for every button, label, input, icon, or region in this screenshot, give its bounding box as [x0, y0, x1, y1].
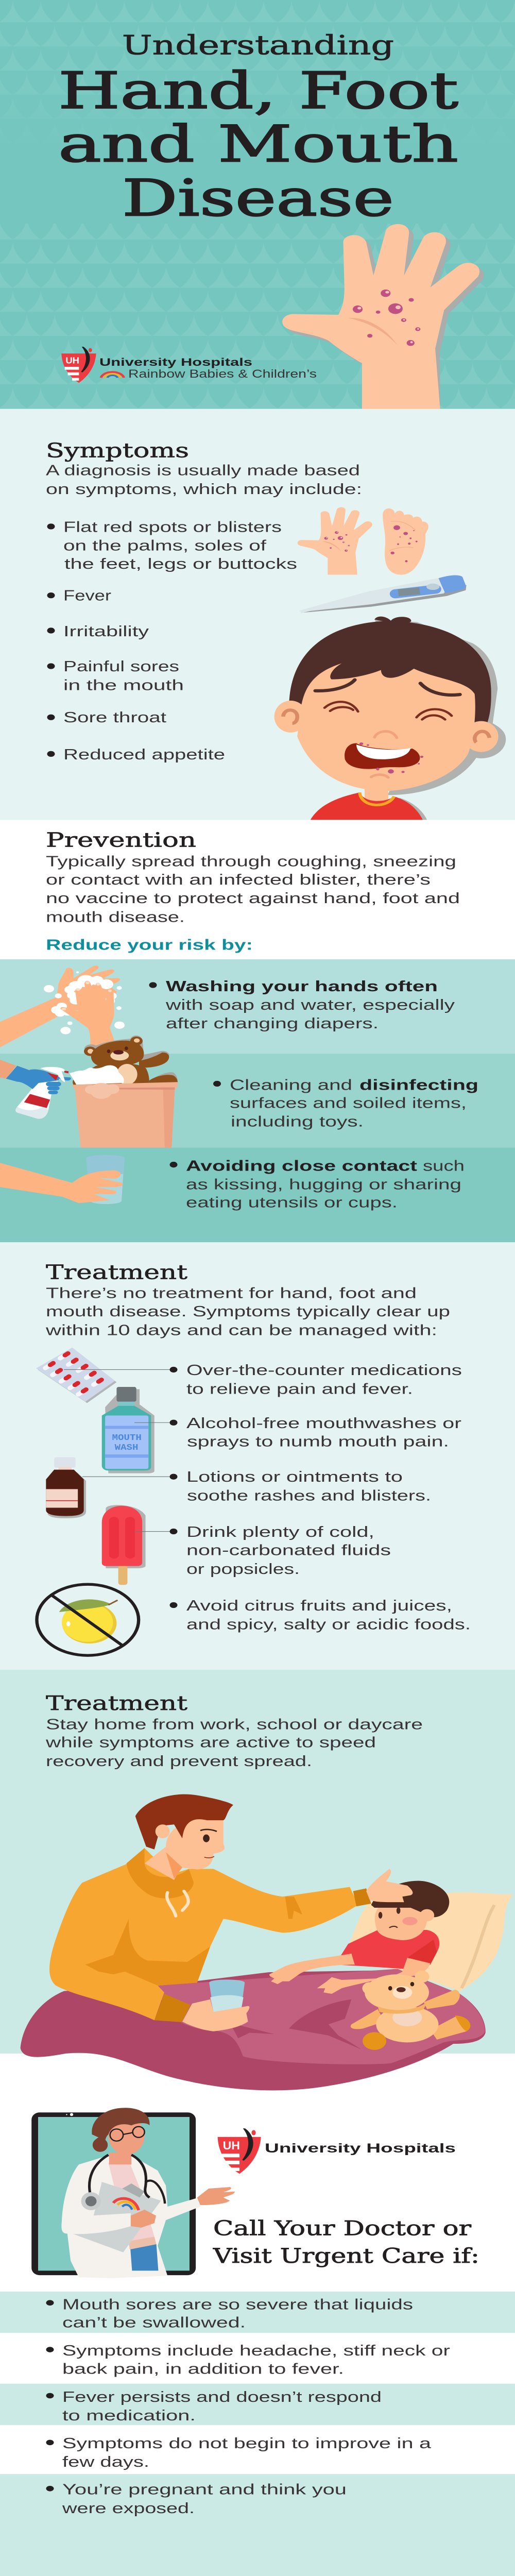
text block: disinfecting: surfaces and soiled items,: [230, 1095, 467, 1111]
text block: stay home: [45, 1716, 423, 1770]
logo: University Hospitals: [218, 2128, 456, 2174]
icon: small hand with spots: [298, 507, 372, 574]
text block: washing hands: [149, 978, 455, 1031]
text block: avoid citrus: Avoid citrus fruits and juices,: [186, 1597, 452, 1614]
text block: stay home: Stay home from work, school or daycare: [46, 1716, 423, 1733]
text block: avoiding contact: such: [423, 1157, 465, 1174]
text block: symptoms intro: A diagnosis is usually made based: [46, 462, 360, 479]
panel: warning sign 5: You’re pregnant and think you: [62, 2481, 347, 2498]
logo: University Hospitals Rainbow Babies and Children's: Rainbow Babies & Children’s: [128, 367, 317, 380]
subheading: reduce your risk: Reduce your risk by:: [46, 937, 253, 953]
icon: foot with spots: [383, 509, 428, 575]
icon: no citrus: [37, 1584, 139, 1655]
text block: treatment intro: mouth disease. Symptoms typically clear up: [46, 1303, 450, 1319]
list: symptoms: the feet, legs or buttocks: [64, 555, 297, 572]
text block: washing hands: with soap and water, especially: [165, 996, 455, 1013]
text block: mouthwash: Alcohol-free mouthwashes or: [186, 1415, 461, 1431]
panel: avoiding contact band: [0, 1147, 515, 1242]
list: symptoms: Irritability: [63, 623, 149, 640]
panel: washing hands band: [0, 959, 515, 1054]
text block: disinfecting: [213, 1076, 478, 1130]
text block: prevention intro: or contact with an infected blister, there’s: [46, 871, 431, 888]
connector lines: [64, 1369, 174, 1532]
list: symptoms: Reduced appetite: [63, 746, 225, 762]
text block: avoid citrus: [170, 1597, 471, 1633]
heading: call your doctor: Visit Urgent Care if:: [213, 2244, 479, 2268]
text block: fluids: non-carbonated fluids: [186, 1541, 391, 1558]
text block: fluids: [170, 1523, 391, 1577]
panel: warning sign 3: to medication.: [62, 2407, 196, 2424]
text block: fluids: or popsicles.: [186, 1561, 300, 1577]
text block: washing hands: after changing diapers.: [166, 1015, 379, 1031]
text block: disinfecting: Cleaning and: [230, 1076, 352, 1093]
text block: washing hands: Washing your hands often: [166, 978, 438, 994]
logo: University Hospitals Rainbow Babies and Children's: University Hospitals: [99, 357, 252, 368]
text block: prevention intro: [46, 853, 460, 925]
panel: warning sign 1: Mouth sores are so severe that liquids: [62, 2296, 413, 2313]
text block: symptoms intro: on symptoms, which may include:: [46, 481, 362, 498]
illustration: teddy bear in bucket with spray: [0, 1036, 178, 1148]
panel: warning sign 3: Fever persists and doesn’t respond: [62, 2388, 382, 2405]
text block: avoiding contact: as kissing, hugging or sharing: [186, 1176, 461, 1193]
title: and Mouth: [58, 115, 458, 174]
list: symptoms: on the palms, soles of: [63, 537, 266, 554]
panel: warning sign 5: were exposed.: [62, 2500, 195, 2517]
panel: warning sign 5: [0, 2474, 515, 2576]
icon: thermometer: [299, 575, 467, 613]
list: symptoms: Painful sores: [63, 658, 179, 674]
text block: prevention intro: mouth disease.: [46, 908, 185, 925]
illustration: hands washing with soap: [0, 965, 125, 1047]
illustration: parent caring for sick child: [21, 1794, 512, 2090]
heading: call your doctor: Call Your Doctor or: [213, 2217, 472, 2241]
panel: warning sign 4: Symptoms do not begin to improve in a: [62, 2435, 431, 2452]
text block: fluids: Drink plenty of cold,: [186, 1523, 374, 1540]
text block: disinfecting: disinfecting: [359, 1076, 478, 1093]
panel: symptoms: [0, 409, 515, 820]
panel: warning sign 1: [0, 2292, 515, 2333]
text block: treatment intro: within 10 days and can be managed with:: [45, 1321, 437, 1338]
text block: lotions: Lotions or ointments to: [186, 1468, 403, 1485]
logo: University Hospitals: University Hospitals: [265, 2141, 456, 2156]
panel: treatment: [0, 1242, 515, 1670]
list: symptoms: in the mouth: [63, 676, 184, 693]
panel: hero header: [0, 0, 515, 409]
text block: prevention intro: no vaccine to protect against hand, foot and: [46, 890, 460, 906]
heading: call your doctor: [213, 2217, 479, 2268]
text block: stay home: while symptoms are active to speed: [45, 1734, 376, 1751]
text block: disinfecting: including toys.: [231, 1113, 364, 1130]
list: symptoms: Fever: [63, 587, 111, 604]
icon: mouthwash bottle: MOUTH: [112, 1433, 142, 1443]
text block: stay home: recovery and prevent spread.: [46, 1753, 312, 1770]
panel: white backdrop below illustration: [0, 2054, 515, 2292]
text block: treatment intro: There’s no treatment for hand, foot and: [46, 1285, 417, 1301]
panel: warning sign 2: back pain, in addition to fever.: [62, 2361, 344, 2377]
text block: lotions: [170, 1468, 431, 1504]
illustration: doctor on tablet: [31, 2108, 235, 2278]
icon: brown ointment bottle: [46, 1457, 86, 1518]
illustration: hand holding glass: [0, 1155, 125, 1204]
title: [58, 30, 458, 228]
logo: University Hospitals Rainbow Babies and Children's: [61, 347, 317, 383]
list: symptoms: [47, 518, 297, 762]
list: symptoms: Sore throat: [63, 709, 166, 726]
icon: red popsicle: [102, 1505, 146, 1585]
heading: treatment: Treatment: [46, 1261, 187, 1284]
text block: mouthwash: sprays to numb mouth pain.: [187, 1433, 449, 1450]
panel: warning sign 4: [0, 2425, 515, 2474]
panel: warning sign 4: few days.: [62, 2453, 149, 2470]
text block: avoiding contact: Avoiding close contact: [186, 1157, 417, 1174]
text block: prevention intro: Typically spread through coughing, sneezing: [46, 853, 456, 870]
text block: mouthwash: [170, 1415, 461, 1450]
list: symptoms: Flat red spots or blisters: [63, 518, 282, 535]
heading: prevention: Prevention: [46, 829, 196, 852]
panel: warning sign 2: [0, 2333, 515, 2384]
panel: stay home: [0, 1670, 515, 2054]
text block: medications: Over-the-counter medications: [186, 1362, 462, 1379]
text block: medications: [170, 1362, 462, 1397]
illustration: crying boy with mouth sores: [274, 617, 506, 820]
text block: lotions: soothe rashes and blisters.: [187, 1487, 431, 1504]
icon: blister pack of capsules: [36, 1348, 116, 1403]
icon: mouthwash bottle: WASH: [115, 1443, 139, 1452]
text block: avoiding contact: eating utensils or cups.: [186, 1194, 398, 1211]
heading: treatment stay home: Treatment: [46, 1692, 187, 1715]
panel: warning sign 1: can’t be swallowed.: [62, 2314, 246, 2331]
icon: hand with blisters: [282, 224, 484, 409]
panel: prevention: [0, 820, 515, 959]
title: Hand, Foot: [58, 61, 458, 120]
text block: treatment intro: [45, 1285, 450, 1338]
text block: symptoms intro: [46, 462, 362, 498]
panel: warning sign 2: Symptoms include headache, stiff neck or: [62, 2342, 450, 2359]
text block: medications: to relieve pain and fever.: [186, 1381, 413, 1397]
panel: disinfecting band: [0, 1054, 515, 1147]
title: Disease: [122, 169, 394, 228]
icon: mouthwash bottle: [102, 1387, 154, 1473]
heading: symptoms: Symptoms: [46, 439, 189, 462]
text block: avoiding contact: [170, 1157, 465, 1211]
title: Understanding: [122, 30, 394, 61]
text block: avoid citrus: and spicy, salty or acidic foods.: [186, 1616, 471, 1633]
panel: warning sign 3: [0, 2384, 515, 2425]
